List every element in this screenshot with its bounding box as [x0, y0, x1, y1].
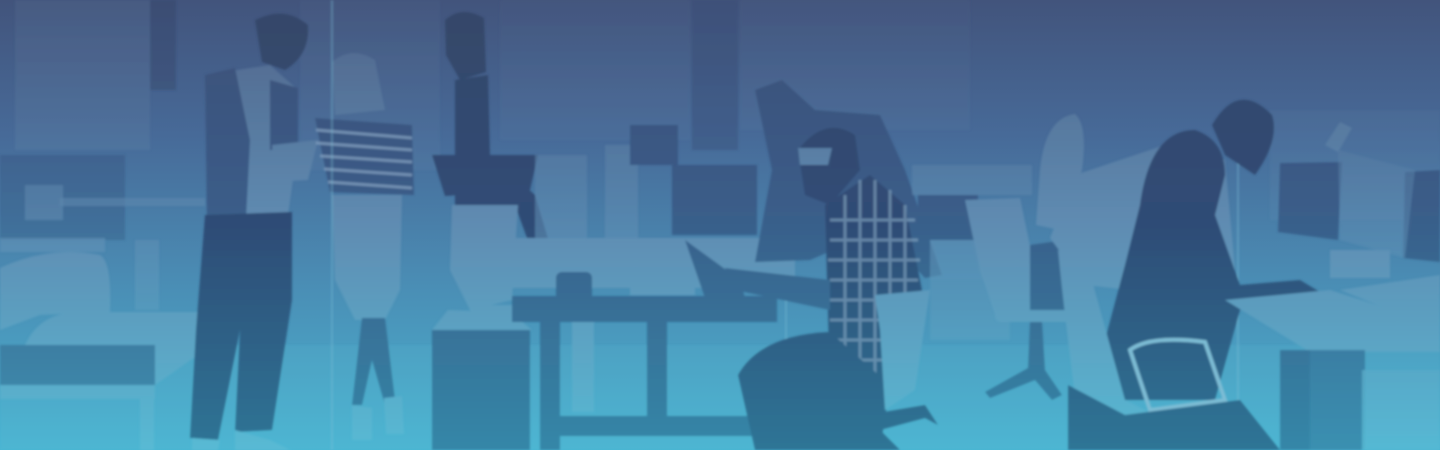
front mesh chair: [1058, 250, 1280, 450]
back wall and windows: [15, 0, 1440, 220]
right desk: [1225, 275, 1440, 450]
right monitors and lamp: [1278, 122, 1440, 278]
person: standing man in profile: [432, 12, 555, 328]
person: woman in striped top: [315, 53, 414, 440]
person: seated man in plaid shirt: [725, 128, 938, 450]
person: woman with ponytail leaning: [1030, 100, 1274, 310]
left sofa: [0, 252, 208, 450]
person: seated woman with long hair: [1105, 130, 1325, 400]
left shelves and desk: [0, 155, 205, 310]
background desks right of center: [912, 165, 1032, 340]
center desks and monitors: [505, 125, 795, 450]
floor: [0, 345, 1440, 450]
filing cabinet: [432, 310, 532, 450]
person: man with tablet: [190, 14, 318, 450]
office chair: [965, 198, 1075, 400]
person: standing man behind desk: [755, 80, 942, 278]
glass partition lines: [331, 0, 1239, 450]
